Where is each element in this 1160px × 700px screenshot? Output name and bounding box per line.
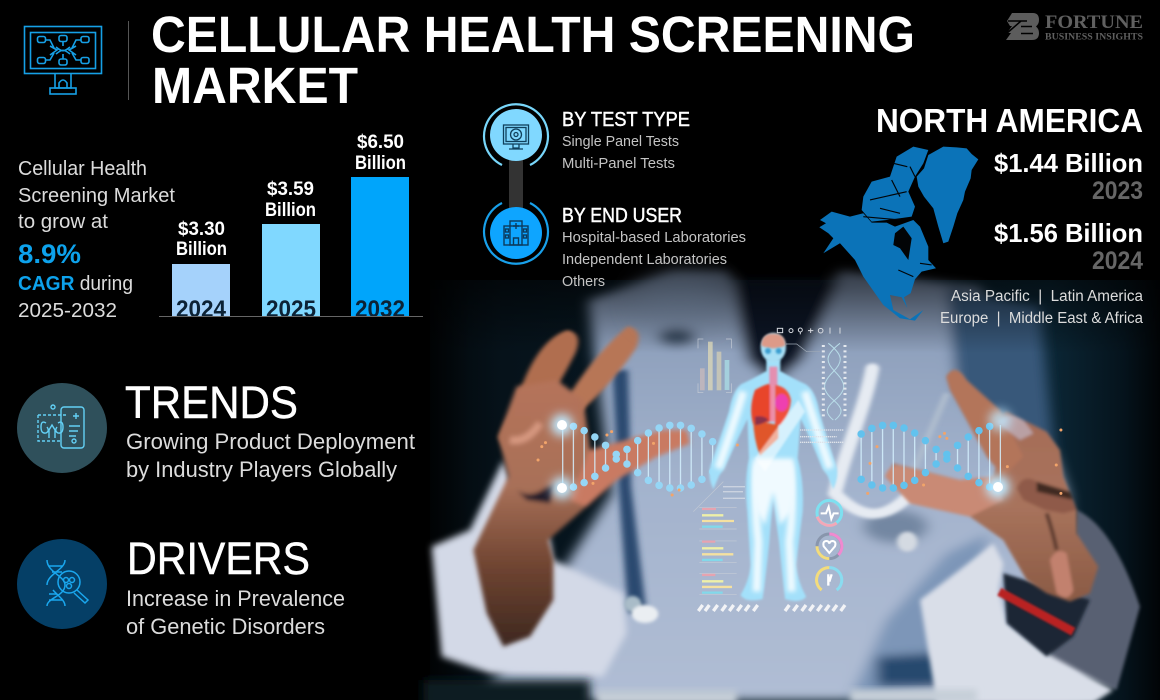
right hand [885, 370, 1098, 602]
icon: trends [17, 383, 107, 473]
trends text: TRENDS [125, 377, 298, 428]
map: North America [819, 147, 978, 321]
bar year labels: 2024 [176, 296, 227, 323]
head [761, 333, 786, 387]
backdrop left blend [400, 280, 470, 700]
CAGR text block: 8.9% [18, 239, 81, 269]
CAGR text block: 2025-2032 [18, 299, 117, 322]
left data rows [693, 430, 843, 594]
bar value labels: Billion [355, 153, 406, 174]
logo: Fortune Business Insights [1006, 12, 1143, 42]
other regions [940, 288, 1143, 327]
right helix glows [986, 409, 1011, 499]
other regions: Europe | Middle East & Africa [940, 310, 1143, 327]
left sleeve [423, 460, 737, 700]
drivers text: Increase in Prevalence [126, 586, 345, 611]
body silhouette [710, 360, 836, 600]
bar 2024 [172, 264, 230, 316]
drivers text: of Genetic Disorders [126, 614, 325, 639]
dark lining [1003, 573, 1090, 657]
soft glow above hologram [638, 262, 710, 298]
CAGR text block: Cellular Health [18, 157, 147, 180]
coat and torso [462, 264, 1144, 700]
bar year labels: 2032 [355, 296, 405, 323]
leader line [786, 344, 820, 352]
North America 2023 value [994, 148, 1143, 205]
photo: doctor with hologram [420, 260, 1156, 700]
health gauge icons [817, 500, 842, 590]
icon row [777, 328, 840, 334]
DNA panel [823, 343, 845, 420]
North America 2024 value: $1.56 Billion [994, 218, 1143, 248]
hatch strips [698, 605, 845, 611]
desk left [423, 680, 590, 700]
photo backdrop [430, 280, 1160, 700]
icon: end user hospital [484, 203, 548, 264]
right DNA helix [861, 425, 1061, 493]
segment: by test type [562, 109, 690, 172]
logo: Fortune Business Insights: FORTUNE [1045, 12, 1143, 33]
bar 2025 [262, 224, 320, 316]
bar value labels: Billion [176, 239, 227, 260]
right sleeve and hand [850, 370, 1140, 700]
left hand [473, 326, 690, 647]
stethoscope tube [835, 368, 947, 552]
bar value labels: $6.50 [357, 132, 404, 153]
North America 2023 value: 2023 [1092, 177, 1143, 205]
desk right [850, 689, 977, 700]
red strap [999, 592, 1073, 632]
title [151, 6, 915, 114]
title: MARKET [152, 57, 358, 114]
segment: by test type: Multi-Panel Tests [562, 156, 675, 172]
CAGR text block: CAGR during [18, 272, 133, 295]
drivers text: DRIVERS [127, 533, 310, 584]
segment: by test type: BY TEST TYPE [562, 109, 690, 131]
icon: drivers [17, 539, 107, 629]
outer sleeve [1047, 510, 1140, 690]
coat placket shadow [613, 370, 647, 613]
organs [751, 384, 805, 472]
North America heading: NORTH AMERICA [876, 102, 1143, 139]
segment: by end user: Hospital-based Laboratories [562, 230, 746, 246]
North America 2024 value: 2024 [1092, 247, 1143, 275]
segment: by test type: Single Panel Tests [562, 134, 679, 150]
logo: Fortune Business Insights: BUSINESS INSIGHTS [1045, 32, 1143, 42]
left helix glows [551, 414, 573, 499]
bar value labels: $3.30 [178, 219, 225, 240]
North America 2024 value [994, 218, 1143, 275]
segment: by end user: Independent Laboratories [562, 252, 727, 268]
desk centre [597, 691, 737, 700]
header divider [128, 21, 129, 100]
CAGR text block [18, 157, 175, 322]
title: CELLULAR HEALTH SCREENING [151, 6, 915, 63]
white cuff [920, 543, 1113, 700]
segment: by end user: Others [562, 274, 605, 290]
bar readout panel [698, 339, 731, 393]
header icon: monitor network [24, 26, 102, 94]
bar 2032 [351, 177, 409, 316]
left DNA helix [538, 425, 737, 495]
bar year labels [176, 300, 404, 316]
other regions: Asia Pacific | Latin America [951, 288, 1143, 305]
segment: by end user: BY END USER [562, 205, 682, 227]
CAGR text block: Screening Market [18, 184, 175, 207]
trends text: by Industry Players Globally [126, 457, 397, 482]
bar year labels: 2025 [266, 296, 316, 323]
bar value labels [176, 132, 406, 260]
CAGR text block: to grow at [18, 210, 108, 233]
coat buttons [624, 596, 658, 623]
segment: by end user [562, 205, 746, 290]
chart baseline [159, 316, 423, 317]
upper coat fade [462, 263, 1144, 348]
bar value labels: Billion [265, 200, 316, 221]
trends text: Growing Product Deployment [126, 429, 415, 454]
trends text [125, 377, 415, 482]
bar chart [159, 132, 423, 323]
North America 2023 value: $1.44 Billion [994, 148, 1143, 178]
drivers text [126, 533, 345, 639]
icon: test type [484, 104, 548, 165]
segment connector [509, 160, 523, 210]
bar value labels: $3.59 [267, 179, 314, 200]
hologram: human body and data panels [693, 328, 845, 611]
